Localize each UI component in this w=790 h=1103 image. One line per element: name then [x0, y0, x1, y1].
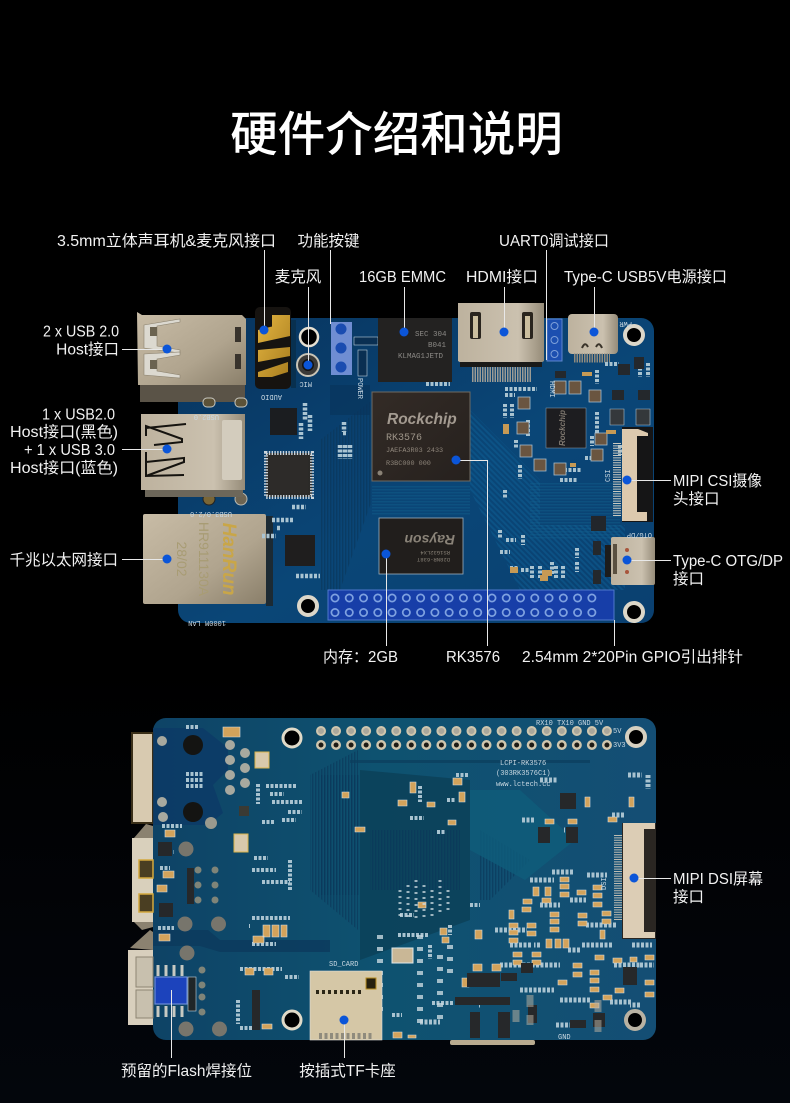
RK3576 processor: Rockchip	[387, 411, 457, 428]
gigabit ethernet connector: HanRun	[218, 523, 239, 595]
silkscreen labels: 5V	[613, 728, 622, 736]
silkscreen labels: (303RK3576C1)	[496, 770, 551, 778]
secondary chips	[266, 408, 606, 566]
dark copper zones	[153, 728, 590, 960]
callout: HDMI	[466, 268, 538, 336]
EMMC chip: SEC 304	[415, 331, 447, 339]
trace areas	[320, 385, 625, 590]
function buttons	[331, 322, 378, 376]
callout: Type-C OTG/DP	[622, 553, 783, 588]
through-hole pads	[162, 735, 249, 1029]
EMMC chip: B041	[428, 342, 447, 350]
RK3576 processor	[372, 392, 470, 481]
title: 硬件介绍和说明	[230, 109, 563, 162]
callout: UART0: UART0调试接口	[499, 232, 609, 250]
gigabit ethernet connector: 28/02	[174, 541, 190, 577]
silkscreen labels: PWR	[619, 319, 632, 327]
memory chip: RS1G32LX4	[420, 549, 450, 556]
callout: USB 3.0: Host接口(黑色)	[10, 423, 118, 441]
callout: Type-C OTG/DP: 接口	[673, 570, 704, 588]
GPIO header	[328, 590, 614, 620]
silkscreen labels: USB3.0/2.0	[190, 509, 232, 517]
silkscreen labels: AUDIO	[261, 392, 282, 400]
RK3576 processor: JAEFA3R03 2433	[386, 447, 443, 455]
callout: 3.5mm audio jack	[57, 232, 276, 334]
callout: RK3576: RK3576	[446, 649, 500, 666]
Type-C power connector	[568, 314, 618, 358]
silkscreen labels: HDMI	[547, 381, 555, 398]
callout: microphone	[275, 268, 322, 370]
callout: Flash pads	[121, 990, 252, 1080]
PCB top side	[178, 318, 654, 623]
silkscreen labels	[329, 720, 626, 1042]
callout: MIPI CSI: 头接口	[673, 490, 720, 508]
silkscreen labels: CSI	[605, 469, 613, 482]
silkscreen labels: POWER	[355, 378, 363, 400]
callout: EMMC: 16GB EMMC	[359, 269, 446, 286]
small components	[157, 727, 654, 1038]
callout: Type-C OTG/DP: Type-C OTG/DP	[673, 553, 783, 570]
Type-C OTG connector	[605, 537, 655, 585]
callout: HDMI: HDMI接口	[466, 268, 538, 286]
silkscreen labels: SD_CARD	[329, 961, 358, 969]
gigabit ethernet connector	[143, 514, 273, 606]
callout: memory: 内存：2GB	[323, 648, 398, 666]
callout: EMMC	[359, 269, 446, 336]
left side connectors	[128, 733, 153, 1025]
callout: USB 2.0: Host接口	[56, 340, 119, 358]
silkscreen labels: OTG/DP	[627, 530, 652, 538]
PCB bottom side	[153, 718, 656, 1040]
TF card socket	[310, 971, 382, 1040]
mounting holes	[283, 728, 645, 1029]
callout: USB 3.0	[10, 406, 172, 477]
UART header	[547, 319, 562, 361]
silkscreen labels: RX10 TX10 GND 5V	[536, 720, 604, 728]
EMMC chip: KLMAG1JETD	[398, 353, 444, 361]
callout: memory	[323, 550, 398, 666]
board: top view	[137, 303, 655, 626]
callout: MIPI DSI	[630, 870, 763, 906]
callout: USB 3.0: Host接口(蓝色)	[10, 459, 118, 477]
callout: USB 2.0	[43, 324, 172, 358]
mounting holes and microphone	[297, 326, 643, 621]
callout: MIPI DSI: MIPI DSI屏幕	[673, 870, 763, 888]
callout: TF card	[299, 1016, 396, 1080]
callout: function buttons: 功能按键	[297, 232, 360, 250]
callout: USB 3.0: 1 x USB2.0	[42, 406, 115, 424]
silkscreen labels: USB2.0	[194, 412, 219, 420]
GPIO solder points	[321, 731, 607, 745]
callout: UART0	[499, 232, 609, 360]
audio jack	[255, 307, 296, 389]
silkscreen labels: 1000M LAN	[188, 618, 226, 626]
callout: Flash pads: 预留的Flash焊接位	[121, 1062, 252, 1080]
gigabit ethernet connector: HR911130A	[196, 522, 212, 597]
callout: MIPI CSI	[622, 472, 762, 508]
callout: MIPI CSI: MIPI CSI摄像	[673, 472, 762, 490]
silkscreen labels: DSI	[601, 877, 609, 890]
callout: Type-C power: Type-C USB5V电源接口	[564, 268, 727, 286]
silkscreen labels: MIC	[299, 379, 312, 387]
callout: ethernet	[9, 551, 172, 569]
Flash pad	[155, 965, 196, 1017]
memory chip: D28NR-638T	[416, 556, 450, 563]
bottom edge connector shadow	[450, 1040, 535, 1045]
silkscreen labels: 3V3	[613, 742, 626, 750]
callout: USB 3.0: + 1 x USB 3.0	[24, 442, 115, 459]
MIPI DSI connector	[618, 823, 656, 939]
RK3576 processor: R3BC000 000	[386, 460, 431, 468]
callout: function buttons	[297, 232, 360, 324]
silkscreen labels: LCPI-RK3576	[500, 760, 546, 768]
EMMC chip	[378, 318, 452, 382]
fine component field	[380, 880, 598, 1035]
memory chip: Rayson	[404, 532, 455, 548]
callout: 3.5mm audio jack: 3.5mm立体声耳机&麦克风接口	[57, 232, 276, 250]
callout: RK3576	[446, 456, 500, 666]
callout: GPIO: 2.54mm 2*20Pin GPIO引出排针	[522, 648, 743, 666]
callout: ethernet: 千兆以太网接口	[9, 551, 118, 569]
callout: TF card: 按插式TF卡座	[299, 1062, 396, 1080]
callout: microphone: 麦克风	[275, 268, 322, 286]
callout: MIPI DSI: 接口	[673, 888, 704, 906]
callout: USB 2.0: 2 x USB 2.0	[43, 324, 119, 340]
USB 2.0 double connector	[137, 312, 247, 407]
secondary chips: Rockchip	[558, 410, 567, 446]
board: bottom view	[128, 718, 656, 1045]
silkscreen labels: www.lctech.cc	[496, 781, 551, 789]
HDMI connector	[458, 303, 544, 372]
silkscreen labels	[188, 319, 652, 626]
MIPI CSI connector	[617, 427, 653, 522]
memory chip	[379, 518, 463, 574]
callout: Type-C power	[564, 268, 727, 336]
small components	[262, 357, 650, 584]
crystal	[392, 948, 413, 963]
silkscreen labels: GND	[558, 1034, 571, 1042]
RK3576 processor: RK3576	[386, 433, 422, 444]
USB 3.0 and 2.0 connector	[141, 414, 247, 505]
